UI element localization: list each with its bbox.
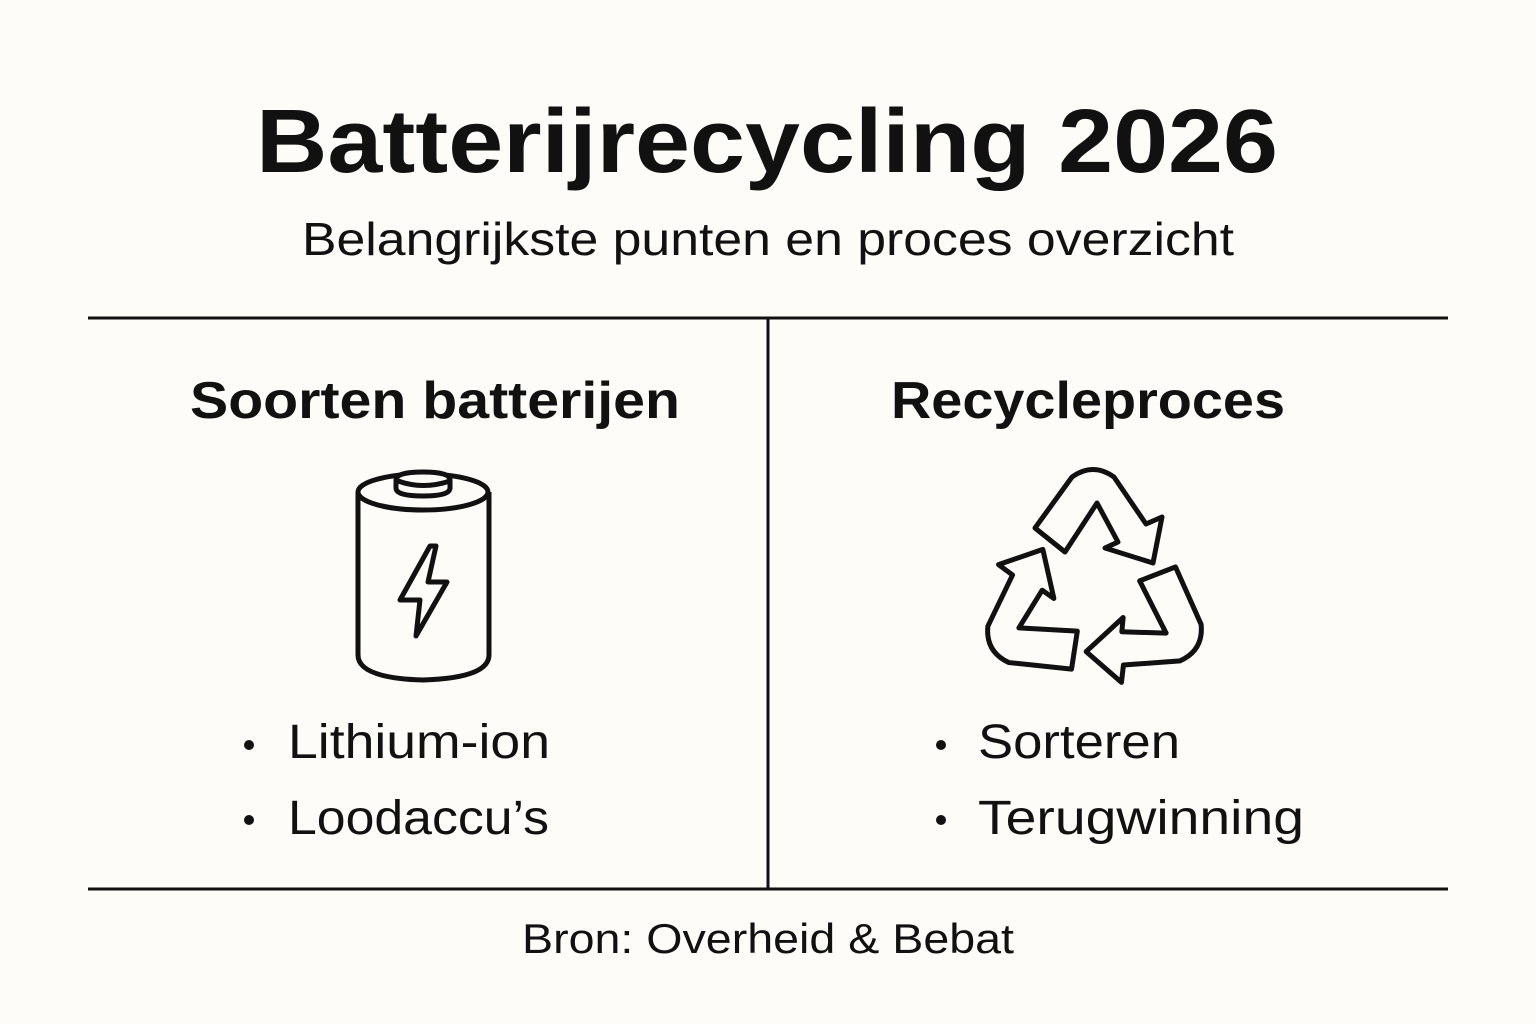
- panel: soorten batterijen: [190, 372, 680, 845]
- panel: recycleproces: [891, 372, 1304, 845]
- title: Batterijrecycling 2026: [256, 92, 1278, 192]
- icon: recycle: [957, 470, 1226, 706]
- list: battery types: [244, 716, 550, 845]
- icon: battery: [358, 472, 489, 680]
- list: process steps: Terugwinning: [978, 792, 1304, 845]
- subtitle: Belangrijkste punten en proces overzicht: [302, 213, 1234, 265]
- heading: soorten batterijen: Soorten batterijen: [190, 372, 680, 430]
- heading: recycleproces: Recycleproces: [891, 372, 1285, 430]
- list: process steps: [936, 716, 1304, 845]
- list: process steps: Sorteren: [978, 716, 1180, 769]
- list: battery types: Lithium-ion: [288, 716, 550, 769]
- footer: source: Bron: Overheid & Bebat: [522, 915, 1014, 962]
- list: battery types: Loodaccu’s: [288, 792, 549, 845]
